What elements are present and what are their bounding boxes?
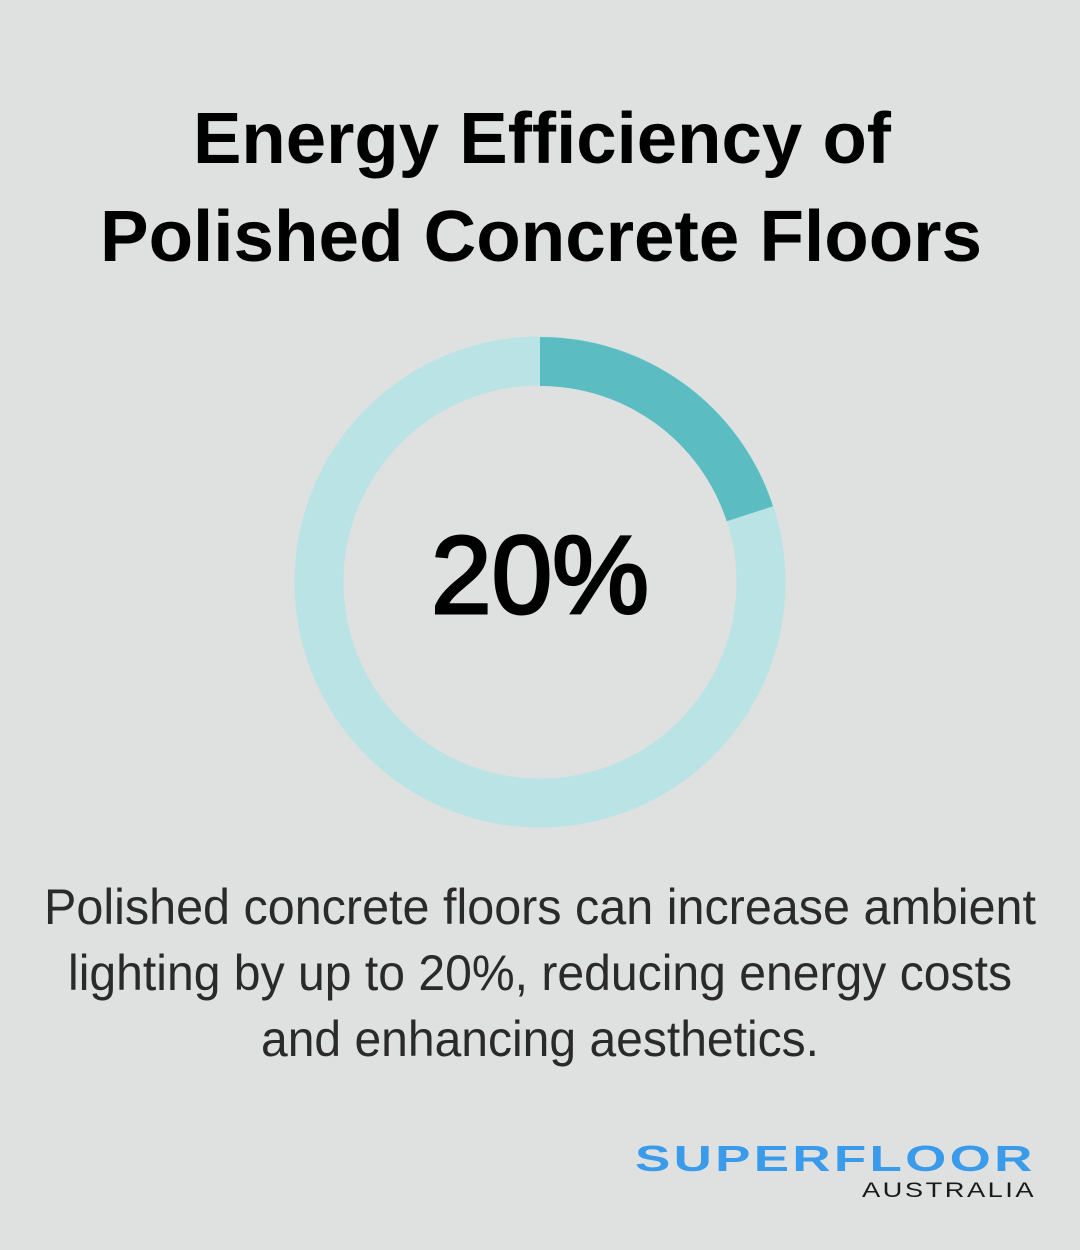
- logo: Superfloor Australia: SUPERFLOOR: [635, 1138, 1032, 1179]
- donut chart: 20%: [319, 337, 773, 803]
- title: Energy Efficiency of: [193, 99, 892, 179]
- center value: 20%: [431, 514, 649, 637]
- logo: Superfloor Australia: AUSTRALIA: [862, 1179, 1034, 1202]
- title: [100, 99, 982, 277]
- logo: Superfloor Australia: [635, 1138, 1034, 1202]
- description text: Polished concrete floors can increase ambient: [44, 879, 1036, 935]
- description text: lighting by up to 20%, reducing energy costs: [68, 945, 1012, 1001]
- description text: [44, 879, 1036, 1067]
- title: Polished Concrete Floors: [100, 197, 982, 277]
- description text: and enhancing aesthetics.: [261, 1011, 819, 1067]
